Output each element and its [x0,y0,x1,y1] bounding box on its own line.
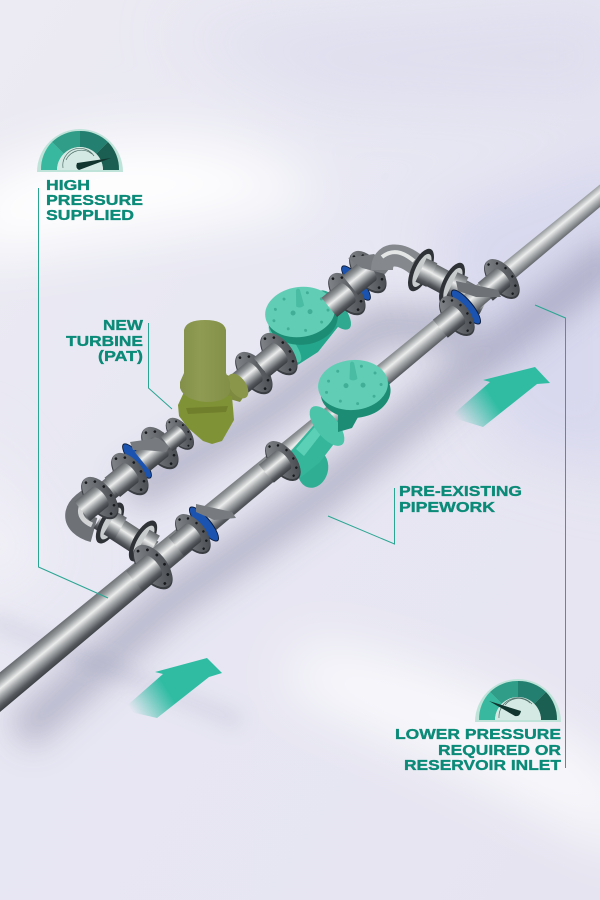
label: pre-existing pipework [399,484,522,516]
label: high pressure supplied [46,178,143,224]
leader: turbine [148,323,172,409]
leader: pre-existing pipework [328,488,394,544]
gauge: high pressure [37,129,123,172]
arrow: lower flow [122,658,222,718]
pipe assembly [0,170,600,717]
leader: high pressure [38,188,108,598]
arrow: upper flow [450,367,550,427]
label: new turbine: NEW [103,318,143,334]
label: high pressure supplied: SUPPLIED [46,208,134,224]
teal check valve on bypass [262,282,357,367]
pipe shadows [20,250,600,735]
label: lower pressure required or reservoir inlet: REQUIRED OR [438,743,562,759]
teal valve on main pipe [290,357,393,491]
label: lower pressure required or reservoir inlet: LOWER PRESSURE [395,727,561,743]
label: new turbine: (PAT) [98,349,143,365]
label: lower pressure required or reservoir inlet: RESERVOIR INLET [404,758,561,774]
label: pre-existing pipework: PRE-EXISTING [399,484,522,500]
main pipe [0,170,600,717]
label: new turbine [66,318,143,365]
label: high pressure supplied: HIGH [46,178,90,194]
label: pre-existing pipework: PIPEWORK [399,500,496,516]
bypass pipework [67,244,491,567]
label: high pressure supplied: PRESSURE [46,193,143,209]
leader: lower pressure [535,305,566,768]
label: lower pressure required or reservoir inlet [395,727,562,774]
flange before valve [252,435,308,492]
gauge: lower pressure [475,679,561,722]
label: new turbine: TURBINE [66,334,143,350]
new turbine [178,320,253,444]
